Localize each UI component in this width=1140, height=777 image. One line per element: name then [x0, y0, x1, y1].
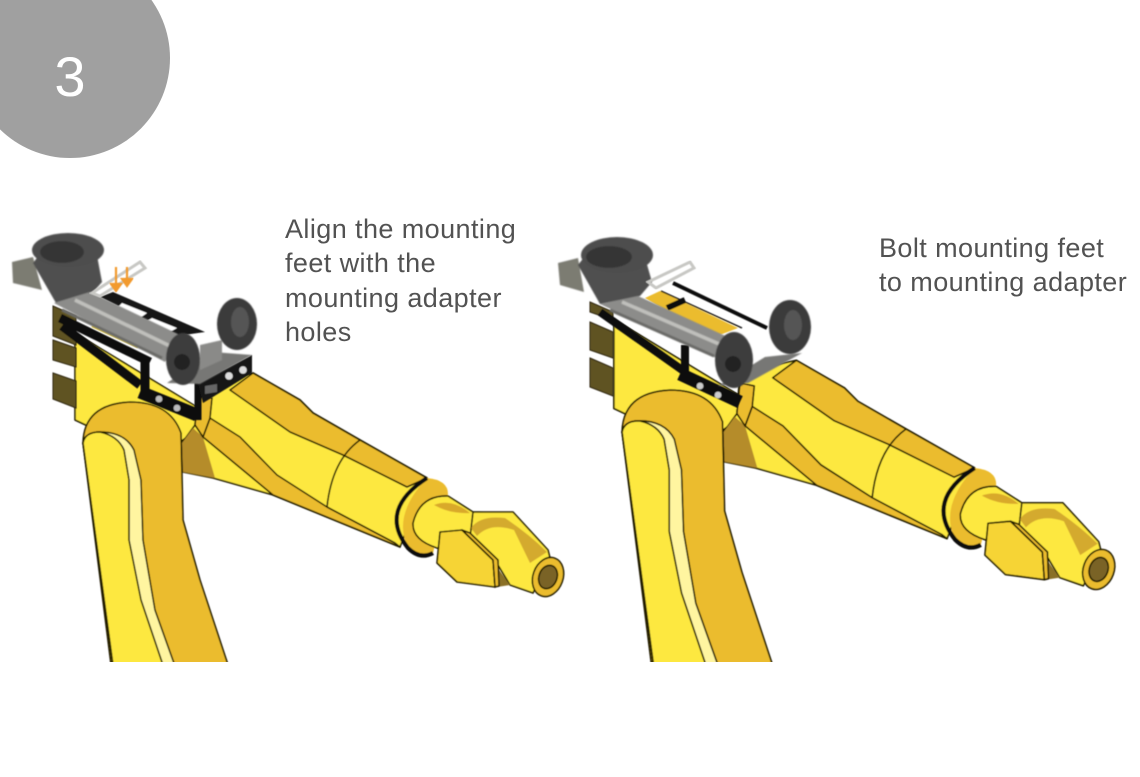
- right instruction text: Bolt mounting feet: [879, 233, 1104, 263]
- left instruction text: holes: [285, 317, 352, 347]
- right mounting adapter bracket: [590, 283, 767, 402]
- right tool body: [558, 237, 811, 388]
- left mounting adapter bracket: [53, 292, 252, 420]
- left robot arm: [75, 333, 569, 680]
- right robot arm: [614, 319, 1120, 675]
- left instruction text: Align the mounting: [285, 214, 516, 244]
- olive mounting blocks: [53, 306, 76, 408]
- left mounting foot: [92, 262, 145, 296]
- right olive mounting blocks: [590, 302, 613, 396]
- left tool body: [12, 233, 257, 385]
- left instruction text: mounting adapter: [285, 283, 502, 313]
- step number badge: [0, 0, 170, 158]
- right instruction text: to mounting adapter: [879, 267, 1127, 297]
- icon: orange alignment arrows: [111, 267, 132, 291]
- step number badge: 3: [54, 45, 86, 108]
- right mounting foot: [648, 262, 694, 288]
- left instruction text: feet with the: [285, 248, 436, 278]
